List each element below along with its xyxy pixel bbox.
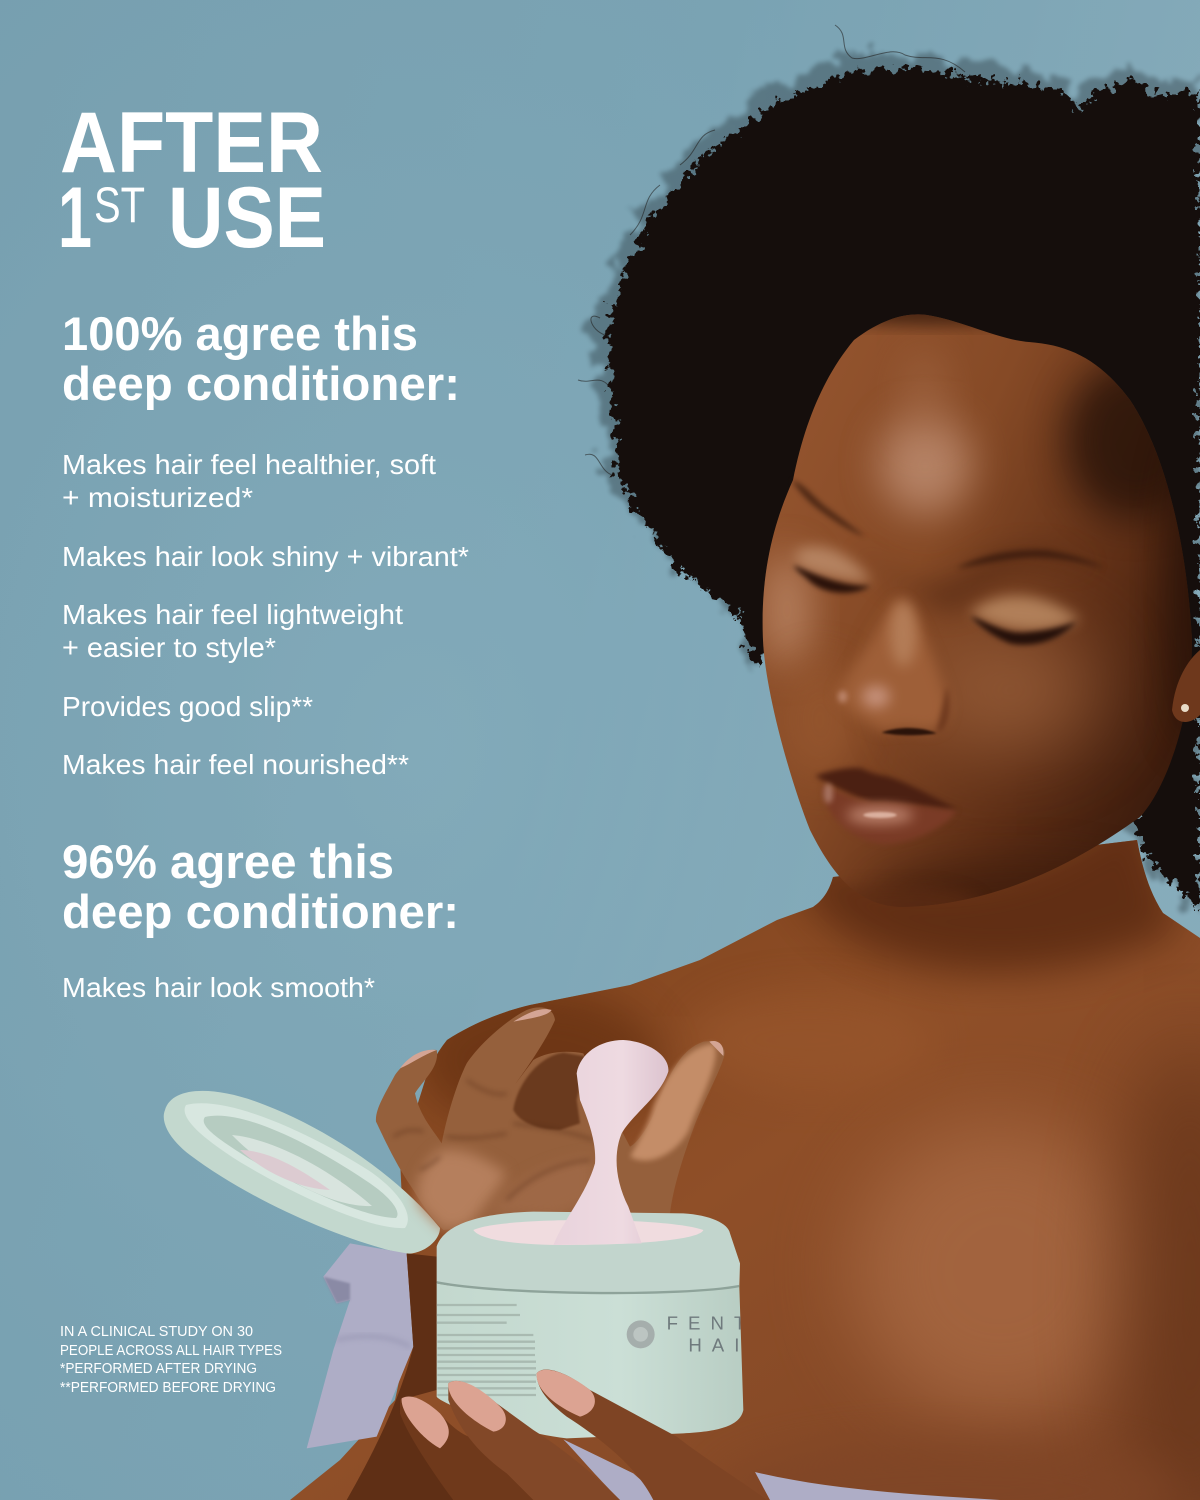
footnote: PEOPLE ACROSS ALL HAIR TYPES <box>60 1342 282 1359</box>
finger 2 <box>448 1381 620 1500</box>
benefit list: Provides good slip** <box>62 691 313 722</box>
cream <box>553 1040 668 1245</box>
heading: 100% agree <box>62 307 460 410</box>
heading: 100% agree: deep conditioner: <box>62 357 460 410</box>
title <box>58 95 326 266</box>
upper nails <box>400 1009 724 1068</box>
footnote: **PERFORMED BEFORE DRYING <box>60 1379 276 1396</box>
body <box>290 840 1200 1500</box>
title: AFTER <box>60 95 323 191</box>
palm <box>417 1149 507 1230</box>
left brow <box>792 480 865 537</box>
right lashes <box>970 616 1077 645</box>
right brow <box>957 550 1105 568</box>
arm behind <box>347 1253 453 1500</box>
nostril <box>882 728 937 735</box>
left lashes <box>793 565 871 593</box>
jar body <box>437 1282 778 1438</box>
earring <box>1181 704 1189 712</box>
face lighting <box>763 301 1200 940</box>
eye socket shadow <box>857 547 1093 610</box>
lid <box>164 1091 440 1254</box>
jar fine print <box>437 1305 536 1395</box>
thumb light <box>630 1043 716 1160</box>
jar inner and rim <box>437 1212 740 1293</box>
facial features <box>792 480 1105 844</box>
jar opening <box>473 1220 703 1245</box>
sleeve <box>307 1243 413 1448</box>
heading: 96% agree <box>62 835 459 938</box>
footnote: IN A CLINICAL STUDY ON 30 <box>60 1323 253 1340</box>
hand, jar and fingers <box>307 1007 778 1500</box>
nose <box>837 600 948 732</box>
benefit list: Makes hair feel lightweight <box>62 599 403 630</box>
jar brand name: FENTY <box>667 1312 778 1333</box>
body lighting <box>420 790 1200 1500</box>
left eyelid <box>795 546 872 582</box>
top garment <box>755 1472 1000 1500</box>
face <box>763 314 1192 907</box>
curled fingers <box>513 1053 587 1130</box>
jar logo <box>627 1320 655 1348</box>
benefit list: + easier to style* <box>62 632 276 663</box>
finger 1 <box>400 1396 573 1500</box>
jar body: HAIR <box>688 1334 773 1355</box>
title: 1 <box>58 170 92 266</box>
benefit list: + moisturized* <box>62 482 253 513</box>
garment between fingers <box>563 1439 663 1500</box>
footnote <box>60 1323 282 1396</box>
benefit list: Makes hair feel healthier, soft <box>62 449 436 480</box>
benefit list: Makes hair feel nourished** <box>62 749 409 780</box>
lips <box>815 768 958 844</box>
footnote: *PERFORMED AFTER DRYING <box>60 1360 257 1377</box>
finger 3 <box>537 1369 767 1500</box>
heading: 100% agree: 100% agree this <box>62 307 418 360</box>
benefit: smooth: Makes hair look smooth* <box>62 972 375 1003</box>
heading: 96% agree: deep conditioner: <box>62 885 459 938</box>
knuckle creases <box>393 1080 593 1200</box>
flyaway curls <box>578 25 965 475</box>
ear <box>1172 650 1200 722</box>
hair <box>578 25 1200 915</box>
benefit list <box>62 449 469 780</box>
benefit list: Makes hair look shiny + vibrant* <box>62 541 469 572</box>
title: ST <box>94 177 145 233</box>
title: USE <box>168 170 326 266</box>
upper hand <box>376 1007 725 1230</box>
right eyelid <box>970 596 1080 630</box>
heading: 96% agree: 96% agree this <box>62 835 394 888</box>
